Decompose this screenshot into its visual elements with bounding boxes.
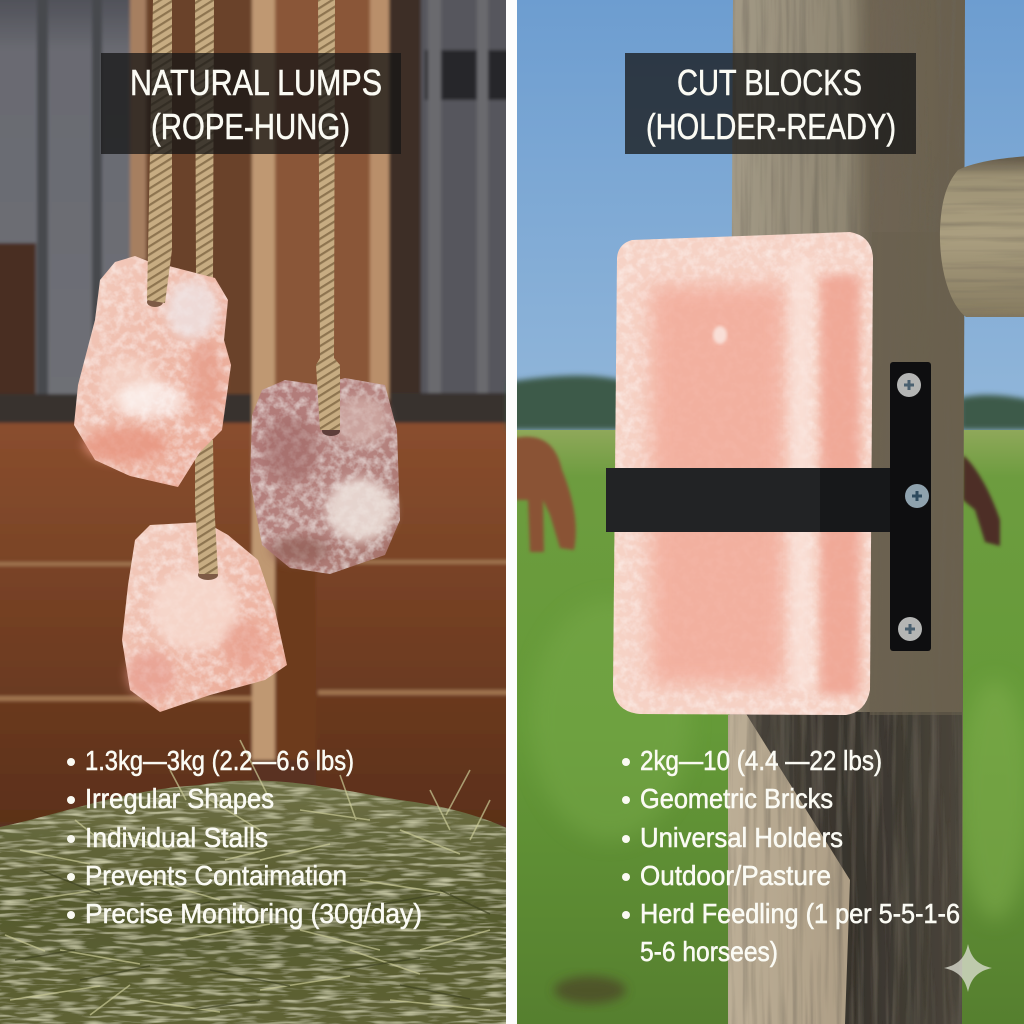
- rope: right: [316, 0, 340, 430]
- rope: lower lump knot: [195, 500, 218, 574]
- horse: right background: [963, 455, 1000, 546]
- rope notch: [147, 297, 163, 307]
- rope notch: [198, 570, 218, 580]
- title: cut blocks: [625, 53, 916, 154]
- title: cut blocks: (HOLDER-READY): [646, 106, 896, 147]
- panel: natural lumps background: [0, 0, 520, 1024]
- bullet list: natural lumps: Precise Monitoring (30g/day): [85, 898, 422, 929]
- bullet list: cut blocks: Universal Holders: [640, 822, 843, 853]
- bullet list: natural lumps: [67, 745, 422, 929]
- salt lump: lower: [122, 522, 287, 712]
- hay pile: [0, 740, 511, 1024]
- bullet list: natural lumps: Prevents Contaimation: [85, 860, 347, 891]
- rope notch: [322, 426, 340, 436]
- rope: left: [147, 0, 172, 303]
- rope: middle: [195, 0, 216, 540]
- metal strap: [606, 468, 890, 532]
- fence post: [728, 0, 965, 1024]
- title: cut blocks: CUT BLOCKS: [677, 62, 862, 103]
- bullet list: natural lumps: Irregular Shapes: [85, 783, 274, 814]
- metal bracket with bolts: [890, 362, 931, 651]
- salt lump: right dark: [250, 378, 400, 574]
- bullet list: cut blocks: 2kg—10 (4.4 —22 lbs): [640, 745, 882, 776]
- bullet list: cut blocks: 5-6 horsees): [640, 936, 778, 967]
- title: natural lumps: [101, 53, 401, 154]
- divider: [506, 0, 517, 1024]
- horse: left background: [507, 437, 576, 552]
- bullet list: natural lumps: 1.3kg—3kg (2.2—6.6 lbs): [85, 745, 354, 776]
- salt block: [613, 232, 873, 715]
- bullet list: cut blocks: Outdoor/Pasture: [640, 860, 831, 891]
- salt lump: upper left: [74, 256, 231, 487]
- title: natural lumps: (ROPE-HUNG): [151, 106, 350, 147]
- panel: cut blocks background: [507, 0, 1024, 1024]
- icon: sparkle watermark: [944, 944, 992, 992]
- title: natural lumps: NATURAL LUMPS: [130, 62, 382, 103]
- bullet list: cut blocks: Geometric Bricks: [640, 783, 833, 814]
- bullet list: cut blocks: Herd Feedling (1 per 5-5-1-6: [640, 898, 960, 929]
- bullet list: cut blocks: [622, 745, 960, 967]
- log rail: [940, 156, 1024, 317]
- bullet list: natural lumps: Individual Stalls: [85, 822, 268, 853]
